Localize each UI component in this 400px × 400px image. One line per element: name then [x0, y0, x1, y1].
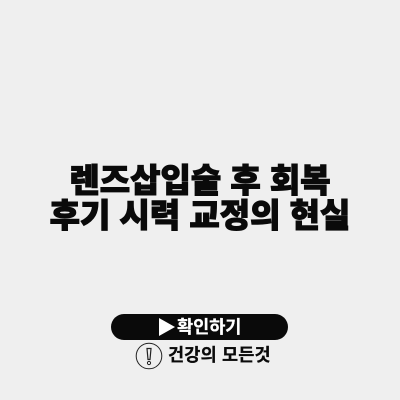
title — [50, 162, 350, 234]
brand row — [136, 342, 271, 370]
button label: 확인하기 — [177, 317, 241, 337]
brand name: 건강의 모든것 — [168, 345, 271, 365]
title line 1: 렌즈삽입술 후 회복 — [69, 162, 331, 199]
title line 2: 후기 시력 교정의 현실 — [50, 197, 350, 234]
icon: exclamation in circle — [136, 342, 162, 370]
button: 확인하기 — [111, 314, 288, 340]
icon: play triangle — [159, 318, 175, 336]
